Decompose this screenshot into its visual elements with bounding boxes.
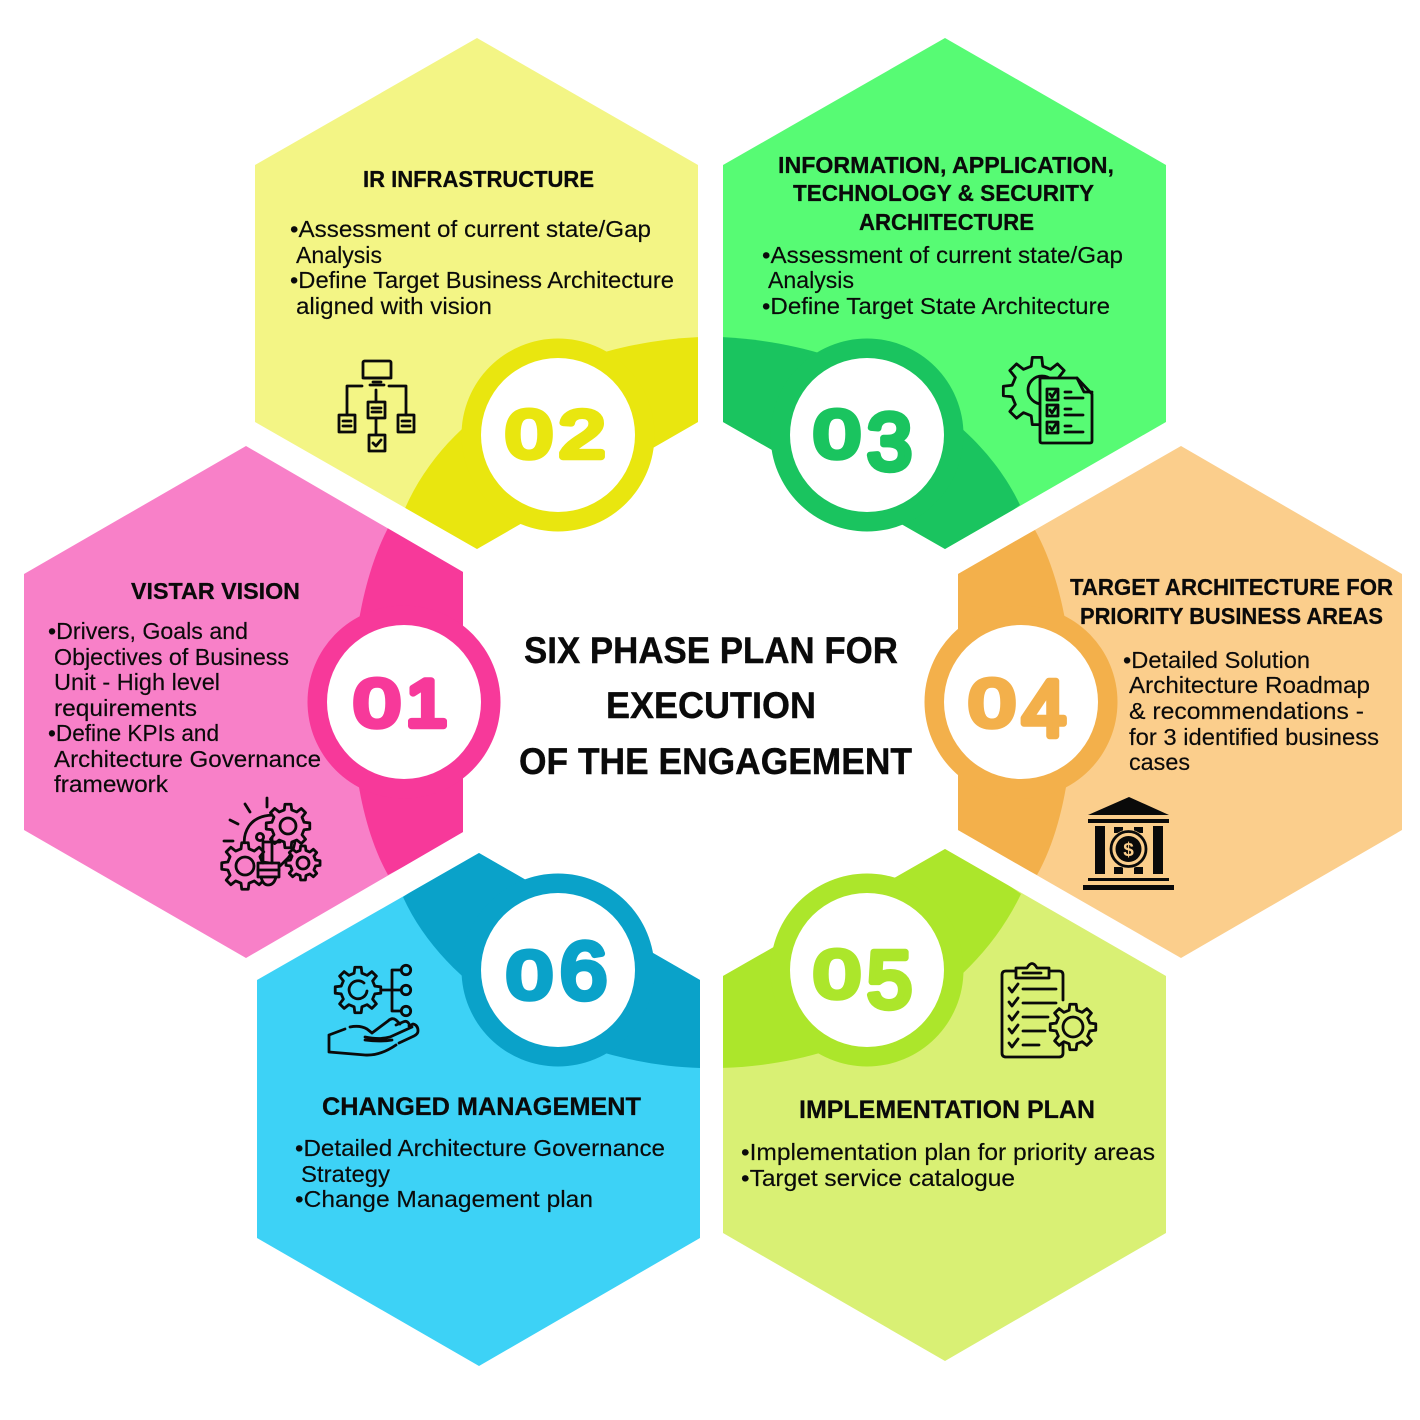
number badge 04: 4 (1022, 664, 1066, 753)
body text 01: Architecture Governance (54, 746, 321, 772)
swoosh 01 (359, 528, 463, 875)
body text 01 (48, 618, 321, 797)
body text 06: Strategy (301, 1161, 391, 1187)
number badge 05: 5 (867, 935, 912, 1024)
body text 04: •Detailed Solution (1123, 647, 1310, 673)
hexagon background 01 (24, 446, 463, 958)
swoosh 06 (403, 845, 702, 1068)
hexagon background 06 (257, 853, 700, 1366)
number badge 01: 0 (354, 666, 400, 740)
icon: bank building with dollar coin: $ (1123, 840, 1134, 861)
number badge 03 (770, 338, 964, 532)
body text 01: •Define KPIs and (48, 720, 219, 746)
number badge 05: 0 (814, 937, 860, 1011)
panel: phase 03 Information, Application, Technology and Security Architecture (720, 38, 1166, 560)
icon: gear with checklist document (1003, 357, 1092, 443)
panel: phase 02 IR Infrastructure (255, 38, 700, 560)
body text 01: framework (54, 771, 169, 797)
body text 03: Analysis (768, 267, 854, 293)
hexagon background 05 (723, 849, 1166, 1361)
body text 04: Architecture Roadmap (1129, 672, 1370, 698)
title: OF THE ENGAGEMENT (519, 741, 912, 782)
icon: bank building with dollar coin (1083, 797, 1174, 890)
number badge 04 (924, 606, 1118, 798)
body text 03 (762, 242, 1123, 319)
heading 02: IR INFRASTRUCTURE (363, 166, 594, 192)
body text 06: •Detailed Architecture Governance (295, 1135, 665, 1161)
panel: phase 05 Implementation Plan (720, 840, 1166, 1361)
heading 04 (1070, 574, 1393, 629)
heading 04: PRIORITY BUSINESS AREAS (1080, 603, 1383, 629)
number badge 02: 0 (506, 397, 552, 471)
heading 03: INFORMATION, APPLICATION, (778, 152, 1114, 178)
body text 04: cases (1129, 749, 1190, 775)
number badge 06: 0 (507, 938, 552, 1012)
swoosh 05 (720, 840, 1021, 1068)
swoosh 04 (958, 530, 1066, 875)
body text 04 (1123, 647, 1379, 775)
body text 02 (290, 216, 674, 319)
number badge 03: 0 (814, 397, 860, 471)
heading 03 (778, 152, 1114, 235)
number badge 06 (462, 874, 654, 1066)
panel: phase 06 Changed Management (257, 845, 702, 1366)
body text 05: •Implementation plan for priority areas (741, 1139, 1155, 1165)
title (519, 630, 912, 782)
number badge 04: 0 (969, 666, 1015, 740)
heading 05: IMPLEMENTATION PLAN (799, 1096, 1095, 1124)
body text 04: for 3 identified business (1129, 724, 1379, 750)
body text 02: aligned with vision (296, 293, 492, 319)
hexagon background 03 (723, 38, 1166, 549)
title: SIX PHASE PLAN FOR (524, 630, 898, 671)
number badge 01: 1 (406, 666, 447, 740)
body text 01: Unit - High level (54, 669, 220, 695)
body text 01: •Drivers, Goals and (48, 618, 248, 644)
number badge 02 (462, 338, 654, 532)
swoosh 03 (720, 337, 1020, 560)
body text 04: & recommendations - (1129, 698, 1364, 724)
heading 04: TARGET ARCHITECTURE FOR (1070, 574, 1393, 600)
heading 01: VISTAR VISION (131, 578, 300, 604)
icon: clipboard checklist with gear (1002, 964, 1096, 1057)
body text 02: Analysis (296, 242, 382, 268)
icon: light bulb with gears (222, 798, 320, 889)
panel: phase 04 Target Architecture for Priority Business Areas (924, 446, 1402, 958)
body text 06: •Change Management plan (295, 1186, 593, 1212)
body text 01: Objectives of Business (54, 644, 289, 670)
number badge 01 (308, 606, 500, 798)
title: EXECUTION (606, 685, 816, 726)
hexagon background 02 (255, 38, 698, 549)
number badge 03: 3 (867, 397, 912, 486)
number badge 05 (770, 874, 964, 1066)
hexagon background 04 (958, 446, 1402, 958)
number badge 06: 6 (560, 926, 607, 1015)
body text 02: •Define Target Business Architecture (290, 267, 674, 293)
icon: flowchart with monitor (339, 361, 414, 451)
body text 03: •Assessment of current state/Gap (762, 242, 1123, 268)
body text 02: •Assessment of current state/Gap (290, 216, 651, 242)
body text 06 (295, 1135, 665, 1212)
body text 03: •Define Target State Architecture (762, 293, 1110, 319)
heading 03: ARCHITECTURE (859, 209, 1034, 235)
heading 03: TECHNOLOGY & SECURITY (793, 180, 1094, 206)
body text 05: •Target service catalogue (741, 1165, 1015, 1191)
body text 05 (741, 1139, 1155, 1191)
body text 01: requirements (54, 695, 197, 721)
heading 06: CHANGED MANAGEMENT (322, 1093, 641, 1121)
number badge 02: 2 (559, 397, 605, 471)
swoosh 02 (403, 337, 700, 560)
panel: phase 01 Vistar Vision (24, 446, 500, 958)
icon: hand holding gear network (329, 965, 418, 1055)
